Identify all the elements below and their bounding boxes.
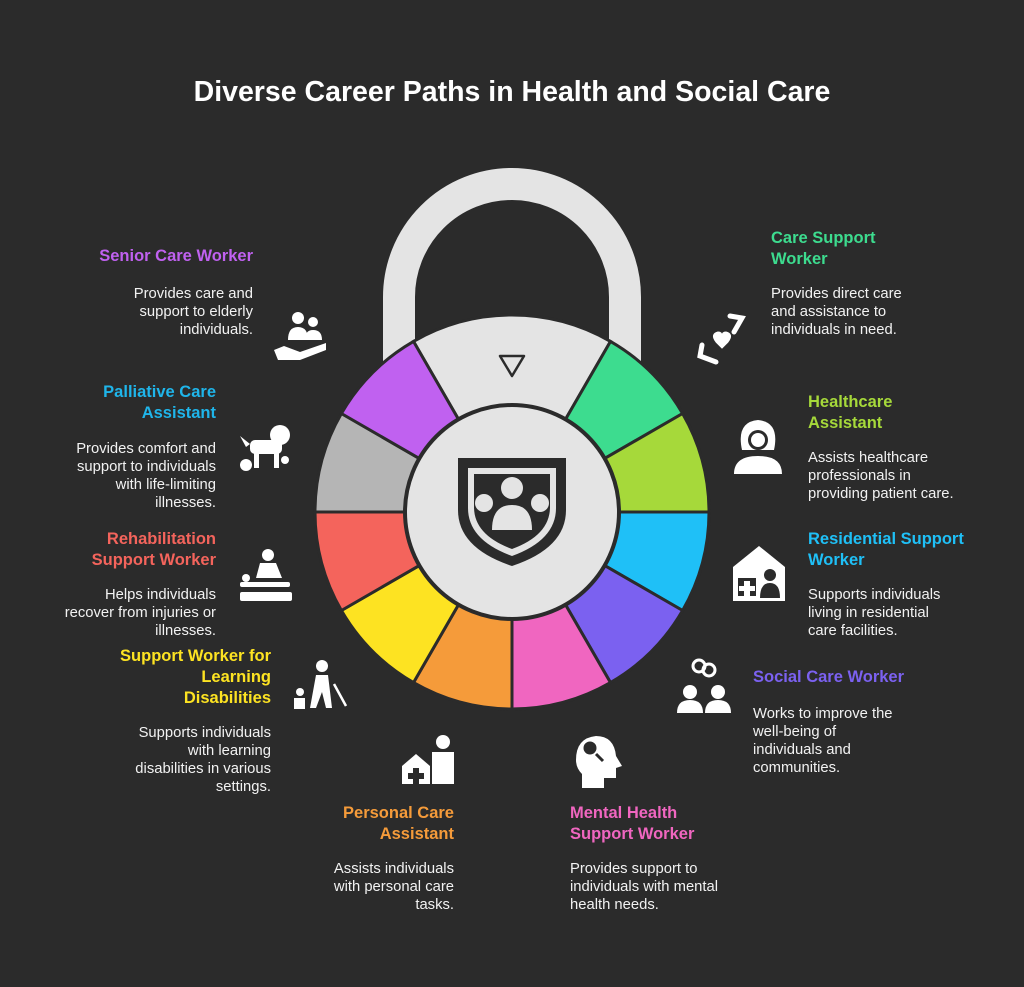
panel: healthcare assistant [808, 393, 954, 502]
icon: shield with people [458, 458, 566, 566]
icon: walking with child [294, 660, 346, 709]
panel: care support worker: individuals in need. [771, 322, 897, 338]
panel: residential support worker: Residential Support [808, 530, 964, 548]
panel: social care worker [752, 668, 905, 776]
panel: rehabilitation support worker: Support Worker [92, 551, 217, 569]
panel: personal care assistant: with personal care [333, 879, 454, 895]
panel: healthcare assistant: providing patient care. [808, 486, 954, 502]
panel: palliative care assistant [76, 383, 216, 511]
panel: residential support worker: Worker [808, 551, 865, 569]
panel: mental health support worker [570, 804, 718, 913]
panel: social care worker: Social Care Worker [753, 668, 905, 686]
panel: rehabilitation support worker [65, 530, 217, 639]
panel: care support worker: Worker [771, 250, 828, 268]
panel: care support worker: Provides direct care [771, 286, 902, 302]
panel: social care worker: communities. [753, 760, 840, 776]
panel: senior care worker: Senior Care Worker [99, 247, 254, 265]
panel: palliative care assistant: Provides comfort and [76, 441, 216, 457]
panel: residential support worker: Supports individuals [808, 587, 940, 603]
panel: senior care worker [99, 247, 254, 338]
panel: care support worker: and assistance to [771, 304, 886, 320]
panel: support worker for learning disabilities: settings. [216, 779, 271, 795]
panel: palliative care assistant: illnesses. [155, 495, 216, 511]
icon: massage [240, 549, 292, 601]
panel: mental health support worker: Support Worker [570, 825, 695, 843]
icon: triangle indicator [500, 356, 524, 376]
panel: residential support worker [808, 530, 964, 639]
icon: nurse [734, 420, 782, 474]
panel: palliative care assistant: Assistant [142, 404, 216, 422]
panel: social care worker: well-being of [752, 724, 837, 740]
panel: palliative care assistant: support to individuals [77, 459, 216, 475]
icon: house with medical person [733, 546, 785, 601]
panel: support worker for learning disabilities: Supports individuals [139, 725, 271, 741]
panel: personal care assistant: Personal Care [343, 804, 454, 822]
lock shackle [399, 184, 625, 400]
panel: social care worker: individuals and [753, 742, 851, 758]
panel: senior care worker: Provides care and [134, 286, 253, 302]
panel: mental health support worker: health needs. [570, 897, 659, 913]
icon: hand with people [274, 312, 326, 360]
panel: support worker for learning disabilities: Disabilities [184, 689, 271, 707]
panel: mental health support worker: Provides support to [570, 861, 698, 877]
panel: support worker for learning disabilities: Learning [201, 668, 271, 686]
panel: rehabilitation support worker: illnesses. [155, 623, 216, 639]
icon: dog [240, 425, 290, 471]
title: Diverse Career Paths in Health and Social Care [194, 76, 830, 108]
panel: personal care assistant: Assists individuals [334, 861, 454, 877]
panel: personal care assistant [333, 804, 454, 913]
panel: care support worker: Care Support [771, 229, 876, 247]
lock wheel [315, 315, 709, 709]
panel: healthcare assistant: Assists healthcare [808, 450, 928, 466]
panel: personal care assistant: tasks. [415, 897, 454, 913]
panel: care support worker [771, 229, 902, 338]
panel: senior care worker: support to elderly [139, 304, 254, 320]
icon: house with person [402, 735, 454, 784]
panel: rehabilitation support worker: Rehabilitation [107, 530, 216, 548]
panel: residential support worker: living in residential [808, 605, 929, 621]
panel: healthcare assistant: professionals in [808, 468, 911, 484]
panel: support worker for learning disabilities [120, 647, 272, 795]
panel: palliative care assistant: Palliative Care [103, 383, 216, 401]
icon: hands with heart [700, 316, 742, 362]
inner disc [405, 405, 619, 619]
panel: personal care assistant: Assistant [380, 825, 454, 843]
panel: mental health support worker: individuals with mental [570, 879, 718, 895]
panel: social care worker: Works to improve the [753, 706, 893, 722]
panel: support worker for learning disabilities: with learning [187, 743, 271, 759]
panel: residential support worker: care facilities. [808, 623, 898, 639]
panel: palliative care assistant: with life-limiting [115, 477, 216, 493]
panel: mental health support worker: Mental Health [570, 804, 677, 822]
panel: support worker for learning disabilities: disabilities in various [135, 761, 271, 777]
panel: healthcare assistant: Healthcare [808, 393, 892, 411]
icon: two people with link [677, 660, 731, 713]
panel: rehabilitation support worker: Helps individuals [105, 587, 216, 603]
panel: support worker for learning disabilities: Support Worker for [120, 647, 272, 665]
panel: rehabilitation support worker: recover from injuries or [65, 605, 216, 621]
panel: senior care worker: individuals. [180, 322, 253, 338]
icon: head with magnifier [576, 736, 622, 788]
panel: healthcare assistant: Assistant [808, 414, 883, 432]
